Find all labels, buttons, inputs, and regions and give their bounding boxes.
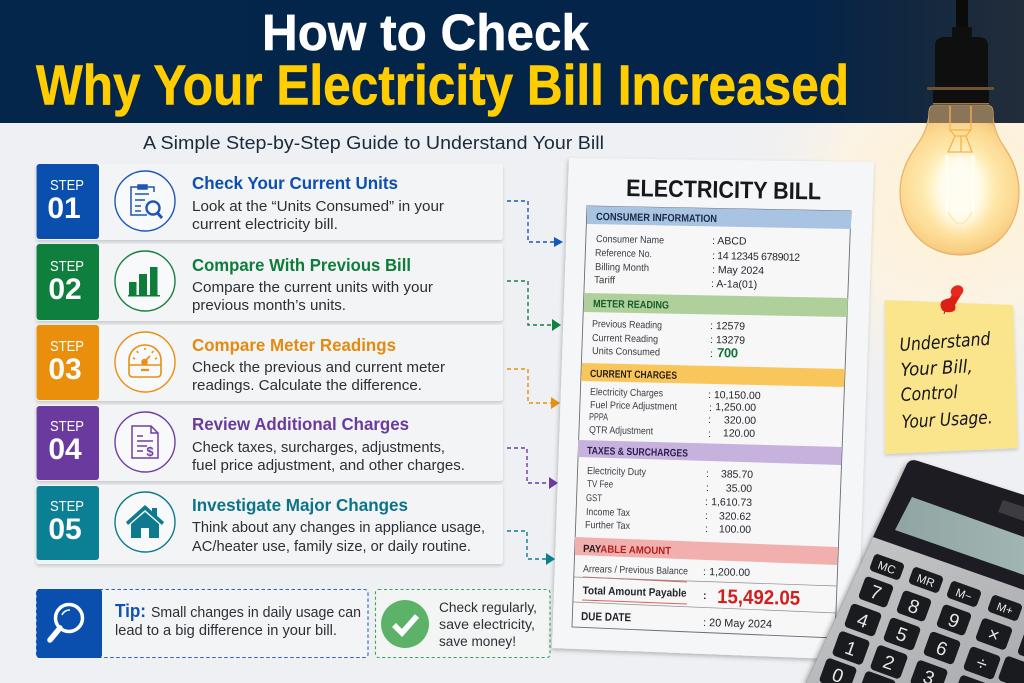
icon: check mark [381, 600, 429, 648]
tip box: Tip: [115, 601, 146, 621]
panel: step 02 [36, 244, 503, 321]
calculator keys: 8 [905, 596, 922, 619]
section: current charges: : [708, 414, 711, 426]
callout: check regularly: Check regularly, [439, 600, 537, 615]
section: taxes and surcharges: TAXES & SURCHARGES [587, 445, 688, 460]
section: current charges: : 10,150.00 [708, 389, 761, 402]
section: taxes and surcharges: Further Tax [585, 520, 630, 532]
section: taxes and surcharges [578, 440, 842, 536]
lamp socket [927, 27, 994, 104]
filament [948, 106, 972, 152]
tip box: lead to a big difference in your bill. [115, 623, 337, 639]
calculator keys: MC [876, 560, 897, 577]
section: payable amount: PAYABLE AMOUNT [583, 543, 672, 557]
section: consumer information: : May 2024 [712, 264, 764, 277]
section: consumer information: : A-1a(01) [711, 278, 757, 291]
section: meter reading: 700 [717, 345, 738, 360]
section: payable amount: Total Amount Payable [582, 585, 687, 600]
section: taxes and surcharges: 100.00 [719, 523, 751, 536]
panel: step 03: 03 [48, 353, 82, 386]
section: consumer information: Consumer Name [596, 234, 665, 246]
section: taxes and surcharges: Electricity Duty [587, 466, 646, 478]
section: current charges: 320.00 [724, 414, 756, 427]
panel: step 02: Compare With Previous Bill [192, 255, 411, 275]
arrow: step 01 to bill [507, 201, 563, 247]
panel: step 01 [36, 164, 503, 240]
panel: step 04: 04 [48, 433, 82, 466]
icon: meter gauge [115, 332, 175, 392]
panel: step 05 [36, 485, 503, 564]
calculator keys: 4 [854, 610, 871, 633]
handwritten note text: Your Usage. [901, 407, 993, 433]
calculator keys: M− [954, 587, 973, 604]
calculator keys: × [985, 624, 1002, 647]
section: taxes and surcharges: : [705, 496, 708, 508]
section: payable amount [573, 537, 838, 631]
panel: step 03: Compare Meter Readings [192, 335, 396, 355]
section: consumer information: Reference No. [595, 248, 652, 260]
panel: step 03: STEP [50, 338, 84, 355]
section: taxes and surcharges: 385.70 [721, 468, 753, 481]
panel: step 04 [36, 405, 503, 481]
calculator keys: 1 [842, 638, 859, 661]
section: meter reading: : 13279 [710, 334, 745, 347]
title: How to Check [262, 4, 590, 61]
section: payable amount: 15,492.05 [717, 586, 800, 610]
section: current charges: Fuel Price Adjustment [590, 400, 677, 413]
calculator keys: 9 [945, 610, 962, 633]
section: taxes and surcharges: GST [586, 493, 602, 504]
panel: step 04: STEP [50, 418, 84, 435]
title: Why Your Electricity Bill Increased [36, 54, 849, 118]
panel: step 02: previous month’s units. [192, 298, 346, 314]
panel: step 05: Investigate Major Changes [192, 495, 408, 515]
handwritten note text: Control [900, 382, 958, 406]
section: meter reading: METER READING [593, 298, 669, 312]
arrow: step 05 to bill [507, 531, 555, 565]
calculator keys: M+ [995, 601, 1014, 618]
section: payable amount: : 20 May 2024 [703, 617, 772, 631]
bulb glass [900, 106, 1019, 255]
handwritten note text [899, 329, 993, 433]
panel: step 04: Review Additional Charges [192, 414, 409, 434]
panel: step 01: current electricity bill. [192, 217, 338, 233]
icon: clipboard with magnifier [115, 171, 175, 231]
panel: step 02: 02 [48, 273, 82, 306]
section: taxes and surcharges: 1,610.73 [711, 496, 752, 509]
subtitle: A Simple Step-by-Step Guide to Understand Your Bill [143, 133, 604, 153]
section: taxes and surcharges: : [705, 510, 708, 522]
panel: step 04: Check taxes, surcharges, adjustments, [192, 440, 445, 456]
solar panel [998, 500, 1024, 521]
section: consumer information: : ABCD [712, 235, 747, 248]
panel: step 03: readings. Calculate the difference. [192, 378, 422, 394]
icon: house [115, 492, 175, 552]
section: meter reading [584, 293, 848, 360]
title [36, 4, 849, 118]
calculator keys [819, 553, 1024, 683]
section: consumer information: Billing Month [595, 262, 649, 274]
panel: step 01: Check Your Current Units [192, 173, 398, 193]
section: meter reading: Current Reading [592, 333, 658, 345]
section: taxes and surcharges: : [706, 468, 709, 480]
icon: invoice document: $ [146, 444, 154, 459]
icon: magnifier [50, 604, 82, 640]
calculator screen [895, 497, 1024, 575]
section: current charges: CURRENT CHARGES [590, 368, 677, 382]
section: taxes and surcharges: : [705, 523, 708, 535]
tip box: Small changes in daily usage can [151, 605, 361, 621]
panel: step 05: 05 [48, 513, 82, 546]
panel: step 02: STEP [50, 258, 84, 275]
section: current charges: : [709, 402, 712, 414]
section: payable amount: : [703, 566, 706, 578]
table frame [572, 206, 851, 638]
calculator keys: 7 [867, 582, 884, 605]
calculator keys: MR [915, 573, 936, 590]
panel: electricity bill [552, 158, 874, 660]
section: meter reading: Units Consumed [592, 346, 660, 358]
section: current charges: PPPA [589, 412, 608, 423]
icon: hanging light bulb [900, 0, 1019, 255]
section: taxes and surcharges: : [706, 482, 709, 494]
callout: check regularly [376, 590, 550, 658]
section: current charges: : [708, 428, 711, 440]
callout: check regularly: save electricity, [439, 617, 535, 632]
panel: step 02: Compare the current units with your [192, 280, 433, 296]
panel: step 05: AC/heater use, family size, or daily routine. [192, 539, 471, 555]
section: consumer information: CONSUMER INFORMATION [596, 211, 717, 225]
section: current charges: Electricity Charges [590, 387, 663, 400]
section: consumer information: Tariff [594, 275, 615, 286]
sticky note [885, 300, 1018, 454]
section: consumer information: : 14 12345 6789012 [712, 250, 800, 264]
section: payable amount: : [703, 590, 706, 602]
tip box [36, 589, 368, 658]
panel: step 01: 01 [47, 192, 81, 225]
section: meter reading: Previous Reading [592, 319, 662, 331]
section: taxes and surcharges: 35.00 [726, 482, 752, 495]
panel: step 05: STEP [50, 498, 84, 515]
section: current charges [581, 363, 845, 440]
section: current charges: 120.00 [723, 427, 755, 440]
icon: red push pin [940, 283, 965, 314]
section: taxes and surcharges: 320.62 [719, 510, 751, 523]
panel: step 03: Check the previous and current meter [192, 360, 445, 376]
section: consumer information [587, 206, 851, 291]
calculator keys: 6 [933, 638, 950, 661]
calculator [806, 460, 1024, 683]
section: taxes and surcharges: TV Fee [587, 479, 614, 491]
bill heading: ELECTRICITY BILL [626, 175, 821, 205]
section: current charges: QTR Adjustment [589, 425, 653, 437]
calculator keys: 5 [893, 624, 910, 647]
panel: step 03 [36, 325, 503, 401]
section: payable amount: 1,200.00 [709, 566, 750, 579]
header banner [0, 0, 1024, 123]
section: meter reading: : [710, 348, 713, 360]
handwritten note text: Understand [899, 329, 992, 356]
handwritten note text: Your Bill, [900, 356, 973, 381]
callout: check regularly: save money! [439, 634, 516, 649]
section: current charges: 1,250.00 [715, 401, 756, 414]
bulb neck over banner [928, 106, 994, 123]
calculator keys: ÷ [973, 653, 990, 676]
filament glow [934, 152, 986, 228]
icon: bar chart [115, 251, 175, 311]
icon: invoice document [115, 412, 175, 472]
arrow: step 03 to bill [507, 369, 560, 409]
arrow: step 04 to bill [507, 448, 558, 489]
section: meter reading: : 12579 [710, 320, 745, 333]
panel: step 01: Look at the “Units Consumed” in your [192, 199, 444, 215]
panel: step 05: Think about any changes in appliance usage, [192, 520, 485, 536]
panel: step 04: fuel price adjustment, and other charges. [192, 458, 465, 474]
panel: step 01: STEP [50, 177, 84, 194]
arrow: step 02 to bill [507, 281, 561, 331]
section: payable amount: Arrears / Previous Balance [583, 564, 689, 577]
calculator keys: 2 [880, 652, 897, 675]
section: taxes and surcharges: Income Tax [586, 507, 630, 519]
section: payable amount: DUE DATE [581, 611, 631, 624]
